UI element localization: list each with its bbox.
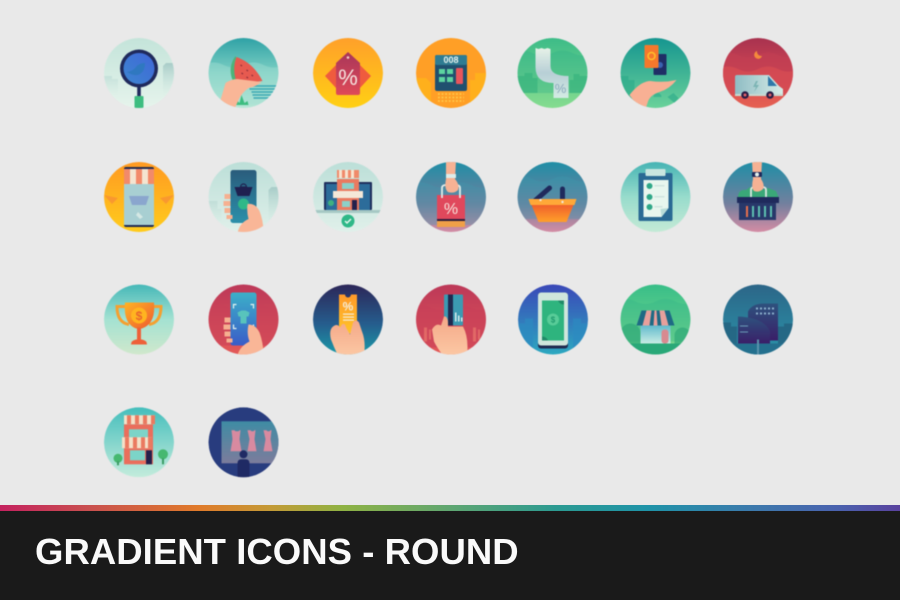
icon: clipboard checklist xyxy=(620,162,690,232)
icon: orange basket xyxy=(512,162,592,232)
icon: hand holding navy basket xyxy=(723,161,793,232)
icon: percent price tag xyxy=(313,38,383,108)
icon: receipt: % xyxy=(555,81,567,96)
icon: shop on laptop xyxy=(313,162,383,232)
icon: hand holding shopping bag xyxy=(411,161,491,232)
title: GRADIENT ICONS - ROUND xyxy=(35,531,519,572)
icon: hand holding credit card xyxy=(411,284,491,356)
icon: receipt xyxy=(512,38,592,108)
icon: hand with phone scanning shirt xyxy=(204,284,284,356)
icon: hand holding shopping bag: % xyxy=(444,201,458,218)
footer band xyxy=(0,511,900,600)
icon: percent price tag: % xyxy=(338,65,358,90)
icon: calculator: 008 xyxy=(443,55,459,65)
icon: hand holding discount ticket: % xyxy=(343,300,354,314)
icon: trophy with dollar coin: $ xyxy=(136,309,143,323)
icon: delivery van xyxy=(718,38,798,109)
icon: phone with banknote xyxy=(518,284,588,356)
icon: hand with floating phones xyxy=(620,38,690,109)
icon: two-storey shop xyxy=(104,407,174,477)
rainbow divider bar xyxy=(0,505,900,511)
icon: phone with banknote: $ xyxy=(551,316,556,324)
icon: hand holding phone with basket xyxy=(208,162,278,233)
icon: magnifying glass xyxy=(104,38,174,108)
icon: trophy with dollar coin xyxy=(104,284,174,354)
icon: office buildings at night xyxy=(723,284,793,356)
icon: hand holding discount ticket xyxy=(313,284,383,356)
icon: mannequins in shop window xyxy=(208,407,282,478)
icon: calculator xyxy=(416,38,486,113)
icon: market stall xyxy=(616,284,696,356)
icon: storefront on phone xyxy=(104,162,174,232)
icon: hand holding watermelon xyxy=(208,37,279,108)
